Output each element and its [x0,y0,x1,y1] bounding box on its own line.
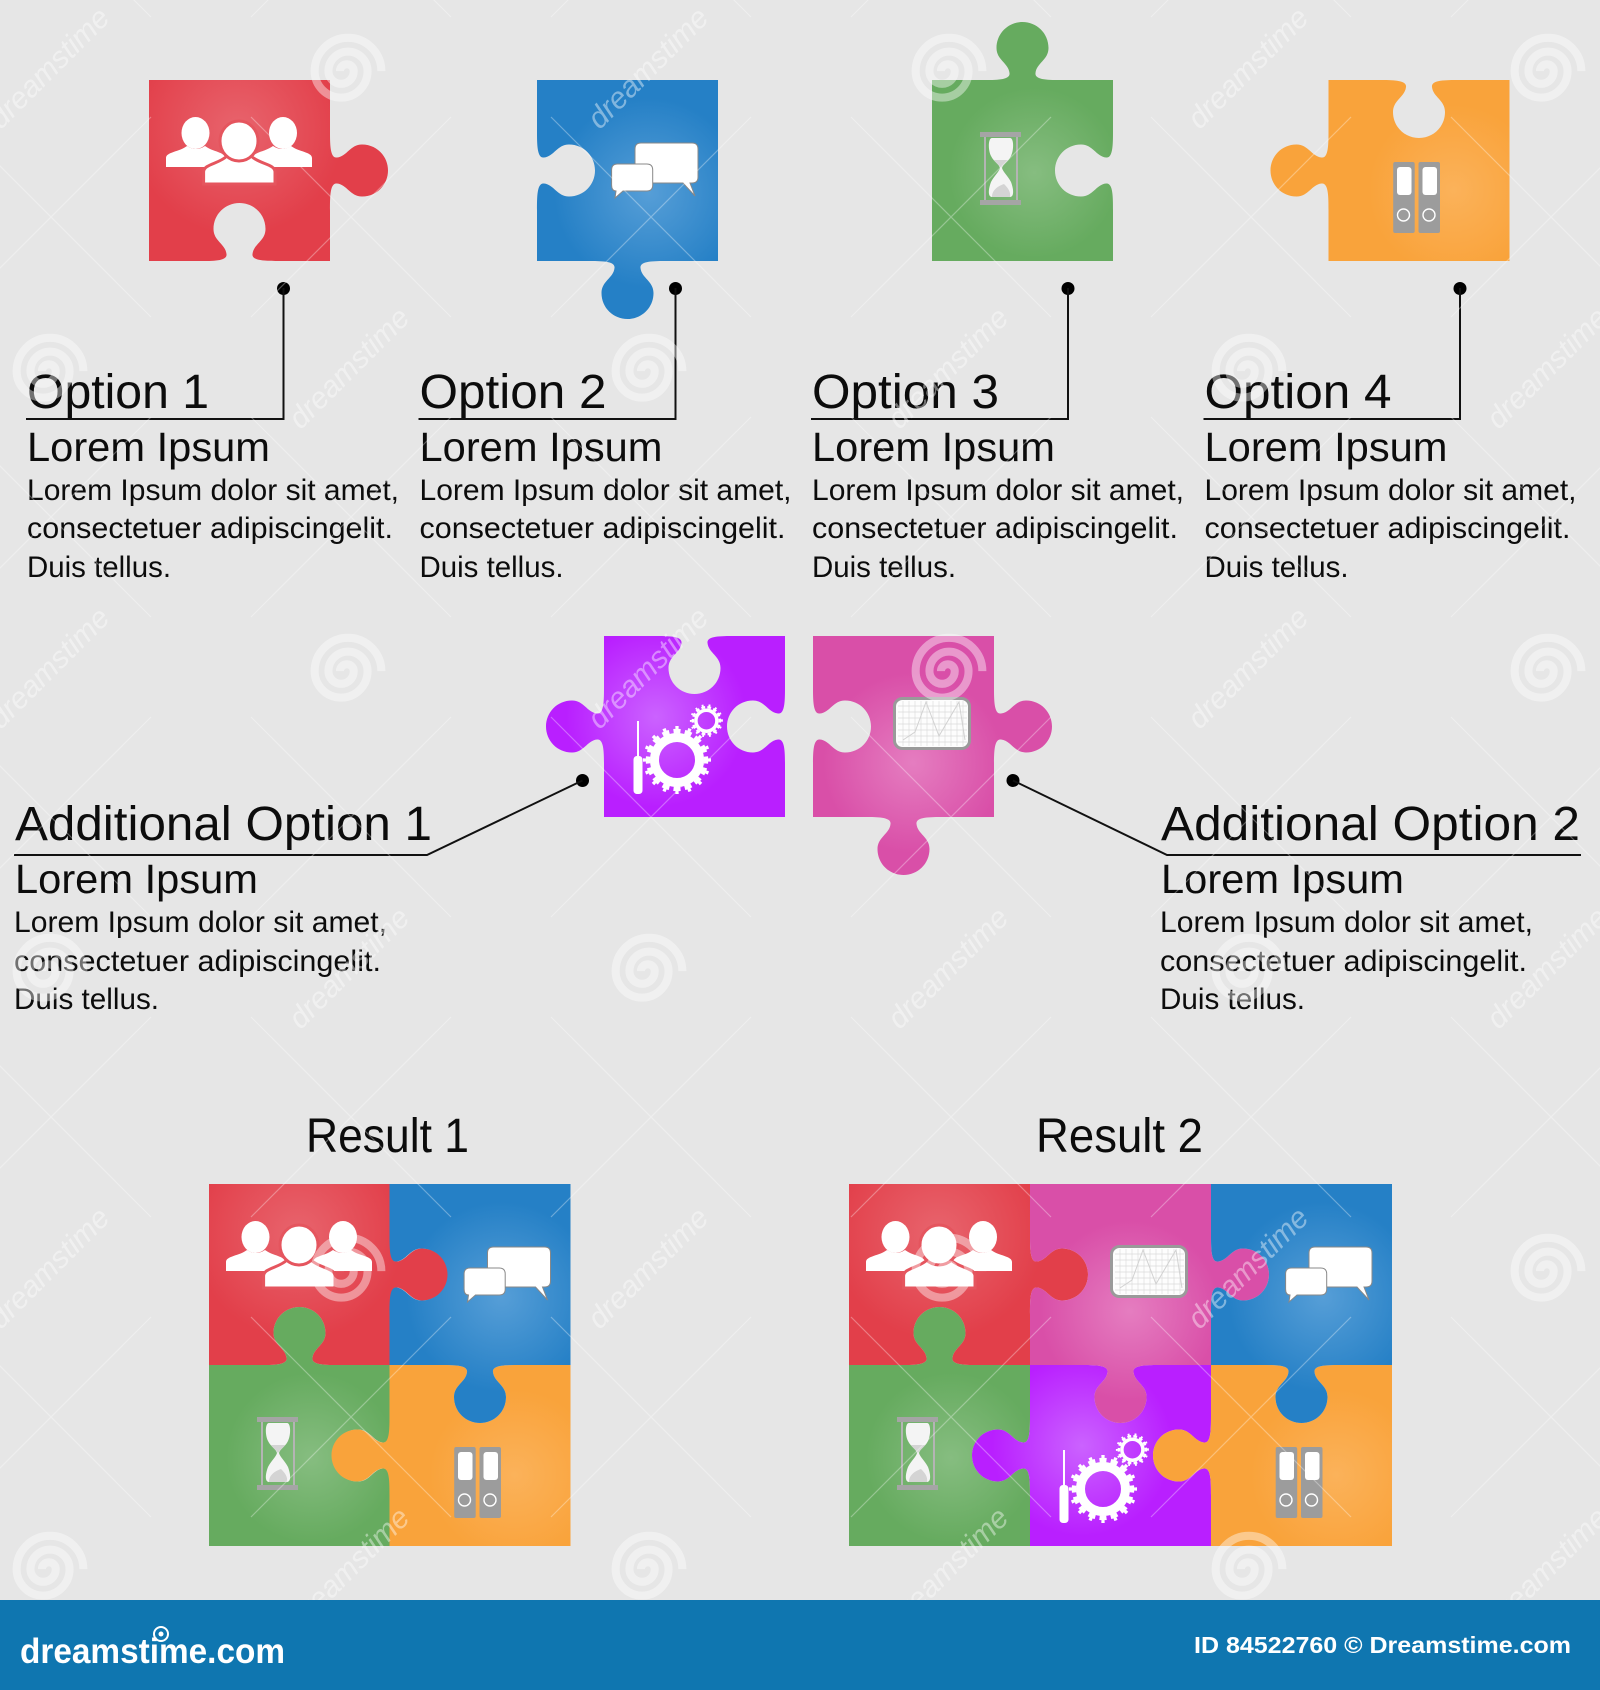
text block: option 4 [1204,366,1576,584]
icon: people [166,117,312,184]
icon: monitor chart [894,698,970,748]
text block: additional option 2: Lorem Ipsum dolor sit amet, [1160,906,1533,939]
watermark overlay: dreamstime [881,1501,1015,1635]
puzzle piece: green, hourglass [932,22,1113,261]
text block: option 3: consectetuer adipiscingelit. [812,512,1178,545]
watermark overlay: dreamstime [581,601,715,735]
text block: option 3: Lorem Ipsum [812,424,1055,470]
text block: option 4: consectetuer adipiscingelit. [1204,512,1570,545]
text block: option 4: Duis tellus. [1204,551,1348,584]
watermark overlay: dreamstime [581,1,715,135]
text block: option 2: Lorem Ipsum [420,424,662,470]
footer credit: ID 84522760 © Dreamstime.com [1194,1632,1571,1658]
text block: option 1: Duis tellus. [27,551,171,584]
puzzle piece: purple, gears [546,636,785,817]
text block: option 4: Option 4 [1204,366,1392,419]
text block: option 1: Lorem Ipsum [27,424,270,470]
text block: additional option 2: consectetuer adipiscingelit. [1160,945,1527,978]
text block: additional option 2: Lorem Ipsum [1161,856,1404,902]
watermark overlay: dreamstime [581,1201,715,1335]
text block: option 3: Lorem Ipsum dolor sit amet, [812,474,1184,507]
puzzle: result 1 [209,1184,570,1546]
heading: result 2: Result 2 [1036,1110,1203,1163]
puzzle piece: pink, monitor chart [813,636,1052,875]
connector: option 1 [26,282,290,419]
text block: option 3: Option 3 [812,366,999,419]
text block: option 3 [812,366,1184,584]
text block: option 2: Lorem Ipsum dolor sit amet, [420,474,792,507]
text block: option 4: Lorem Ipsum [1204,424,1448,470]
text block: option 3: Duis tellus. [812,551,956,584]
text block: additional option 1: Duis tellus. [14,983,159,1016]
text block: option 2: consectetuer adipiscingelit. [420,512,786,545]
text block: option 1: consectetuer adipiscingelit. [27,512,393,545]
watermark overlay: dreamstime [881,901,1015,1035]
heading: result 1: Result 1 [306,1110,469,1163]
text block: additional option 2 [1160,798,1580,1016]
text block: option 1 [27,366,399,584]
icon: binders [1393,162,1440,233]
icon: hourglass [980,132,1021,205]
footer logo: dreamstime.com [20,1632,285,1671]
text block: additional option 2: Additional Option 2 [1161,798,1580,851]
icon: speech bubbles [612,143,698,198]
puzzle: result 2 [849,1184,1392,1546]
watermark overlay: dreamstime [282,1501,416,1635]
text block: additional option 1 [14,798,432,1016]
text block: option 2: Duis tellus. [420,551,564,584]
text block: additional option 1: Lorem Ipsum [15,856,258,902]
connector: option 4 [1204,282,1466,419]
text block: option 2 [420,366,792,584]
text block: additional option 2: Duis tellus. [1160,983,1305,1016]
puzzle piece: red, people [149,80,388,261]
watermark overlay: dreamstime [282,901,416,1035]
footer bar [0,1600,1600,1690]
connector: additional option 1 [14,774,589,855]
connector: additional option 2 [1006,774,1581,855]
text block: additional option 1: Additional Option 1 [15,798,432,851]
text block: additional option 1: consectetuer adipiscingelit. [14,945,381,978]
connector: option 3 [811,282,1074,419]
text block: additional option 1: Lorem Ipsum dolor sit amet, [14,906,387,939]
text block: option 4: Lorem Ipsum dolor sit amet, [1204,474,1576,507]
connector: option 2 [418,282,682,419]
puzzle piece: orange, binders [1270,80,1510,261]
text block: option 1: Lorem Ipsum dolor sit amet, [27,474,399,507]
icon: gears and screwdriver [634,705,722,794]
watermark overlay: dreamstime [282,301,416,435]
puzzle piece: blue, chat [537,80,718,319]
watermark overlay: dreamstime [1181,1201,1315,1335]
watermark overlay: dreamstime [881,301,1015,435]
text block: option 1: Option 1 [27,366,209,419]
watermark overlay: dreamstime [1181,1,1315,135]
text block: option 2: Option 2 [420,366,606,419]
watermark overlay: dreamstime [1181,601,1315,735]
